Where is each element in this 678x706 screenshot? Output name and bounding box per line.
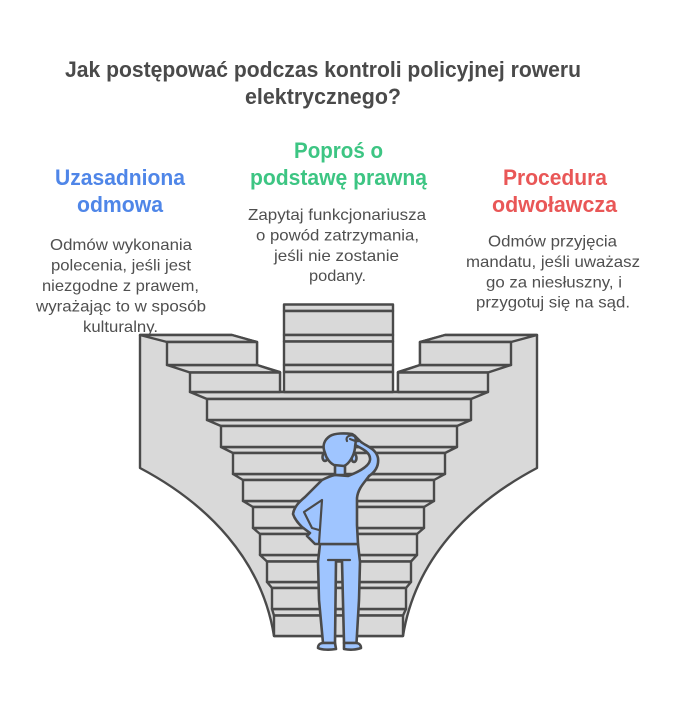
text: procedura odwoławcza description: Odmów przyjęcia (488, 234, 617, 250)
heading: procedura odwoławcza: odwoławcza (492, 192, 618, 217)
text: uzasadniona odmowa description: niezgodne z prawem, (42, 278, 199, 295)
text: procedura odwoławcza description: go za niesłuszny, i (486, 274, 622, 292)
title (65, 57, 581, 109)
text: uzasadniona odmowa description: wyrażając to w sposób (35, 298, 206, 316)
lower steps (207, 399, 471, 636)
text: procedura odwoławcza description (466, 234, 640, 312)
text: poproś o podstawę prawną description: o powód zatrzymania, (256, 228, 419, 244)
text: uzasadniona odmowa description: Odmów wykonania (50, 237, 192, 254)
central stair tower (284, 304, 393, 392)
text: uzasadniona odmowa description: polecenia, jeśli jest (51, 258, 192, 274)
pocket line (328, 559, 350, 561)
text: procedura odwoławcza description: mandatu, jeśli uważasz (466, 254, 640, 271)
panel: poproś o podstawę prawną (248, 138, 428, 285)
stair tread top faces (140, 335, 537, 616)
person right foot (344, 643, 361, 650)
text: poproś o podstawę prawną description (248, 207, 426, 285)
heading: poproś o podstawę prawną: podstawę prawną (250, 165, 428, 190)
panel: procedura odwoławcza (466, 165, 640, 312)
person torso and arms (293, 436, 378, 544)
heading: poproś o podstawę prawną: Poproś o (294, 138, 383, 163)
person hand on head (347, 435, 359, 441)
panel: uzasadniona odmowa (35, 165, 206, 336)
text: poproś o podstawę prawną description: Zapytaj funkcjonariusza (248, 207, 426, 224)
person left foot (318, 643, 336, 650)
text: poproś o podstawę prawną description: podany. (309, 268, 366, 285)
heading: uzasadniona odmowa (55, 165, 186, 217)
heading: procedura odwoławcza (492, 165, 618, 217)
person head (324, 433, 356, 466)
heading: uzasadniona odmowa: odmowa (77, 192, 164, 217)
text: uzasadniona odmowa description (35, 237, 206, 336)
staircase illustration (140, 304, 537, 636)
text: procedura odwoławcza description: przygotuj się na sąd. (476, 294, 630, 312)
curved side walls (140, 335, 537, 636)
upper right steps (398, 342, 511, 392)
heading: poproś o podstawę prawną (250, 138, 428, 190)
person neck (335, 462, 345, 475)
person ears (322, 453, 356, 462)
title: elektrycznego? (245, 84, 401, 109)
upper left steps (167, 342, 280, 392)
inner arm line (304, 500, 322, 543)
heading: uzasadniona odmowa: Uzasadniona (55, 165, 186, 190)
title: Jak postępować podczas kontroli policyjnej roweru (65, 57, 581, 82)
person legs (318, 544, 360, 643)
text: uzasadniona odmowa description: kulturalny. (83, 319, 158, 336)
heading: procedura odwoławcza: Procedura (503, 165, 608, 190)
icon: confused person from behind (293, 433, 378, 650)
text: poproś o podstawę prawną description: jeśli nie zostanie (273, 248, 399, 265)
